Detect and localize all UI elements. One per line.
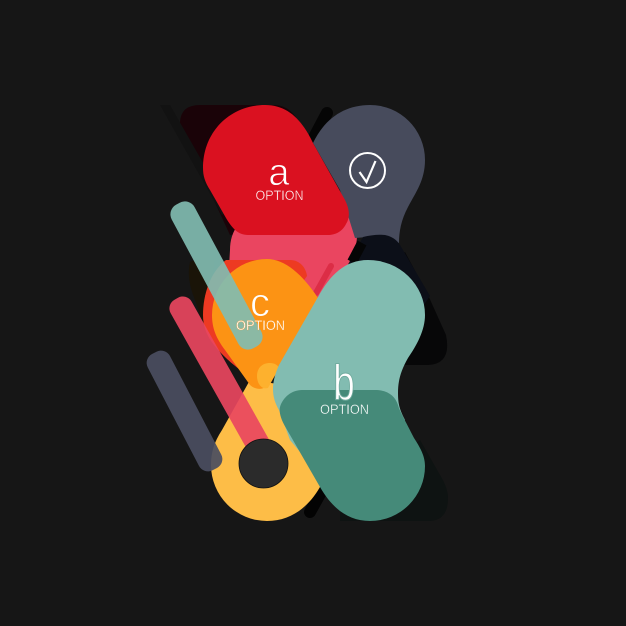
hole: dark circle bbox=[239, 439, 288, 488]
shape: dark slate teardrop bbox=[313, 105, 425, 243]
letter c: c bbox=[250, 281, 270, 325]
bar: translucent teal bbox=[167, 198, 266, 353]
label OPTION for c: OPTION bbox=[236, 317, 285, 333]
bar: slate bbox=[143, 347, 226, 475]
shadows behind shapes bbox=[160, 105, 448, 521]
small amber circle bbox=[257, 363, 279, 388]
shape: yellow ring bbox=[211, 380, 330, 521]
letter a: a bbox=[268, 152, 290, 194]
stripe: dark red shadow bbox=[316, 266, 331, 293]
stripe under slate bbox=[352, 243, 362, 262]
letter b: b bbox=[333, 354, 355, 411]
shape: red option a bbox=[203, 105, 349, 235]
shape: dark green lower panel bbox=[280, 390, 425, 521]
shadow under slate bbox=[345, 235, 430, 340]
bar: pink bbox=[166, 293, 280, 471]
shape: orange option c bbox=[212, 259, 318, 389]
label OPTION: OPTION bbox=[320, 401, 369, 417]
icon: check mark circle bbox=[350, 153, 385, 188]
label OPTION: OPTION bbox=[256, 187, 304, 203]
shape: pink body bbox=[228, 190, 357, 330]
shape: mint option b bbox=[273, 260, 425, 521]
shape: red-orange backing bbox=[203, 260, 307, 370]
